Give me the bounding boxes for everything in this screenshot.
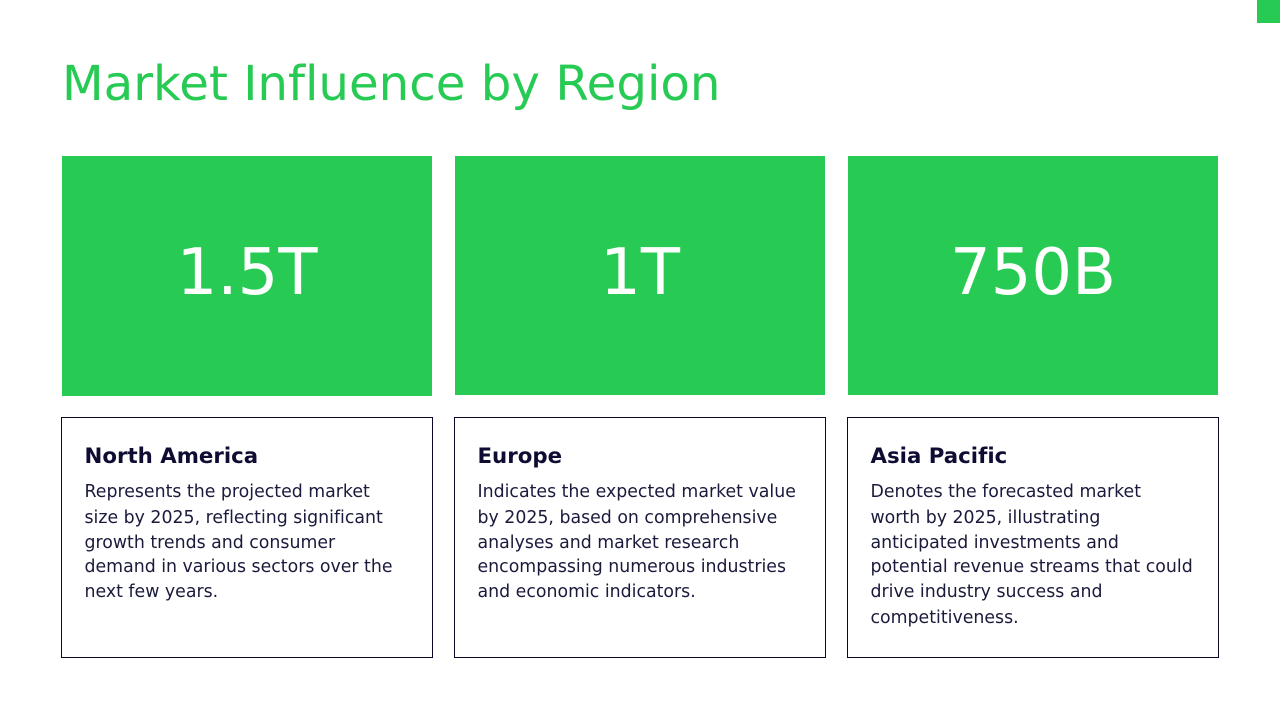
text: North America description: Represents the projected market [84,482,370,502]
heading: North America: North America [84,444,258,469]
stat panel: Europe 1T [455,156,825,395]
text: North America description: size by 2025, reflecting significant [84,508,383,528]
text: Europe description [478,482,796,602]
card: Europe [454,417,826,658]
text: Asia Pacific description [870,482,1193,628]
heading: Asia Pacific: Asia Pacific [870,444,1007,469]
text: North America description [84,482,393,602]
title: Market Influence by Region [62,56,720,112]
text: Europe description: analyses and market research [478,533,739,553]
text: Europe description: by 2025, based on comprehensive [478,508,777,528]
stat panel: Europe 1T: 1T [600,236,680,310]
stat panel: North America 1.5T [62,156,432,396]
stat panel: North America 1.5T: 1.5T [177,236,317,310]
text: Asia Pacific description: anticipated investments and [870,533,1119,553]
stat panel: Asia Pacific 750B [848,156,1218,395]
text: Asia Pacific description: worth by 2025, illustrating [870,508,1100,528]
card: Asia Pacific [847,417,1219,658]
text: Asia Pacific description: Denotes the forecasted market [870,482,1141,502]
text: Europe description: Indicates the expected market value [478,482,796,502]
text: Europe description: and economic indicators. [478,582,696,602]
card: North America [61,417,433,658]
text: North America description: growth trends and consumer [84,533,335,553]
corner accent [1257,0,1280,23]
text: Asia Pacific description: drive industry success and [870,582,1102,602]
text: North America description: demand in various sectors over the [84,557,393,577]
heading: Europe: Europe [478,444,562,469]
text: Asia Pacific description: competitiveness. [870,608,1019,628]
text: Europe description: encompassing numerous industries [478,557,786,577]
text: North America description: next few years. [84,582,218,602]
stat panel: Asia Pacific 750B: 750B [950,236,1116,310]
text: Asia Pacific description: potential revenue streams that could [870,557,1193,577]
